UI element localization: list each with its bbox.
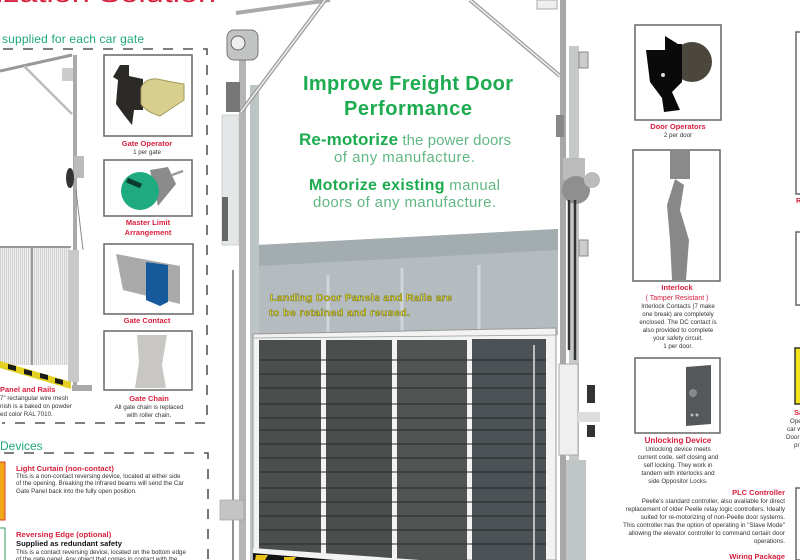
panel border: car gate <box>2 49 207 423</box>
cropped box: safety sign <box>795 348 800 404</box>
cropped box: middle <box>796 232 800 305</box>
cropped box: upper <box>796 32 800 194</box>
caption: gate contact: Gate Contact <box>124 316 171 325</box>
caption: master limit arrangement <box>125 218 172 237</box>
panel heading: devices: Devices <box>0 439 43 453</box>
text: plc controller <box>623 488 786 545</box>
text: plc controller: operations. <box>754 538 785 545</box>
cropped caption: safety: Door <box>786 434 799 441</box>
caption: unlocking device: current code, self closing and <box>638 454 719 461</box>
caption: panel and rails <box>0 385 72 418</box>
text: light curtain: Gate Panel back into the fully open position. <box>16 488 137 495</box>
text: plc controller: allowing the elevator controller to command certain door <box>629 530 785 537</box>
caption: interlock <box>639 283 717 350</box>
heading: improve freight door performance: Improve Freight Door <box>303 73 513 95</box>
cropped caption: safety <box>786 408 800 449</box>
caption: door operators <box>650 122 706 139</box>
text: motorize existing: Motorize existing manual <box>309 177 500 194</box>
text: re-motorize: Re-motorize the power doors <box>299 130 511 149</box>
image: master limit arrangement <box>104 160 192 216</box>
caption: interlock: one break) are completely <box>642 311 715 318</box>
image: gate chain <box>104 331 192 390</box>
cropped box: lower <box>796 488 800 560</box>
caption: unlocking device: Unlocking device meets <box>645 446 711 453</box>
upper door panel <box>258 229 558 335</box>
caption: gate chain: with roller chain. <box>126 412 172 419</box>
icon: reversing edge <box>0 528 5 560</box>
text: plc controller: replacement of older Peelle relay logic controllers. Ideally <box>626 506 786 513</box>
caption: unlocking device: side Oppositor Locks. <box>648 478 708 485</box>
panel heading: car gate: supplied for each car gate <box>2 32 144 46</box>
text: plc controller: This controller has the option of operating in "Slave Mode" <box>623 522 785 529</box>
text: light curtain: Light Curtain (non-contact) <box>16 464 114 473</box>
text: re-motorize: of any manufacture. <box>334 149 475 166</box>
caption: unlocking device: Unlocking Device <box>645 436 712 445</box>
caption: gate operator: Gate Operator <box>122 139 172 148</box>
caption: unlocking device: tandem with interlocks and <box>641 470 715 477</box>
caption: panel and rails: Panel and Rails <box>0 385 55 394</box>
left guide rail <box>220 30 259 560</box>
text: reversing edge: Supplied as redundant safety <box>16 539 123 548</box>
text: re-motorize <box>299 130 511 166</box>
caption: master limit arrangement: Master Limit <box>126 218 171 227</box>
text: plc controller: PLC Controller <box>732 488 785 497</box>
caption: panel and rails: ed color RAL 7010. <box>0 411 53 418</box>
text: plc controller: suited for re-motorizing of non-Peelle door systems. <box>641 514 785 521</box>
image: gate operator <box>104 55 192 136</box>
caption: gate chain: All gate chain is replaced <box>115 404 184 411</box>
caption: interlock: also provided to complete <box>643 327 714 334</box>
caption: interlock: ( Tamper Resistant ) <box>646 295 708 302</box>
caption: unlocking device: self locking. They work in <box>643 462 713 469</box>
panel border: devices <box>4 453 208 560</box>
text: light curtain: of the opening. Breaking the infrared beams will send the Car <box>16 480 184 487</box>
image: unlocking device <box>635 358 720 433</box>
caption: panel and rails: 7" rectangular wire mesh <box>0 395 69 402</box>
panel: supplied for each car gate <box>0 32 207 423</box>
caption: interlock: Interlock <box>661 283 693 292</box>
image: interlock <box>633 150 720 281</box>
caption: interlock: Interlock Contacts (7 make <box>641 303 715 310</box>
callout: landing door panels: to be retained and reused. <box>269 307 410 319</box>
panel: landing door components <box>623 25 786 560</box>
heading: improve freight door performance <box>303 73 513 120</box>
caption: gate chain <box>115 394 184 419</box>
heading: improve freight door performance: Performance <box>344 98 472 120</box>
gate frame and mesh panels <box>253 328 556 560</box>
caption: master limit arrangement: Arrangement <box>125 228 172 237</box>
text: motorize existing <box>309 177 500 211</box>
caption: panel and rails: nish is a baked on powder <box>0 403 72 410</box>
icon: light curtain <box>0 462 5 520</box>
panel: devices <box>0 439 208 560</box>
text: light curtain <box>16 464 184 495</box>
gate drawing <box>0 55 92 391</box>
text: plc controller: Peelle's standard controller, also available for direct <box>642 498 785 505</box>
caption: door operators: 2 per door <box>664 132 692 139</box>
right guide rail <box>556 0 600 560</box>
text: reversing edge <box>16 530 186 560</box>
caption: door operators: Door Operators <box>650 122 706 131</box>
caption: unlocking device <box>638 436 719 485</box>
text: reversing edge: This is a contact reversing device, located on the bottom edge <box>16 549 186 556</box>
text: motorize existing: doors of any manufacture. <box>313 194 496 211</box>
caption: gate chain: Gate Chain <box>129 394 169 403</box>
image: door operators <box>635 25 721 120</box>
text: light curtain: This is a non-contact reversing device, located at either side <box>16 473 181 480</box>
callout: landing door panels <box>269 292 452 319</box>
caption: gate operator: 1 per gate <box>133 149 161 156</box>
far right cropped boxes <box>786 32 800 560</box>
callout: landing door panels: Landing Door Panels and Rails are <box>270 292 452 304</box>
text: reversing edge: Reversing Edge (optional) <box>16 530 112 539</box>
image: gate contact <box>104 244 193 314</box>
top frame and braces <box>236 0 560 112</box>
door illustration <box>220 0 600 560</box>
caption: gate operator <box>122 139 172 156</box>
caption: interlock: enclosed. The DC contact is <box>639 319 717 326</box>
cropped caption: safety: pr <box>794 442 800 449</box>
caption: interlock: your safety circuit. <box>653 335 703 342</box>
caption: interlock: 1 per door. <box>663 343 693 350</box>
